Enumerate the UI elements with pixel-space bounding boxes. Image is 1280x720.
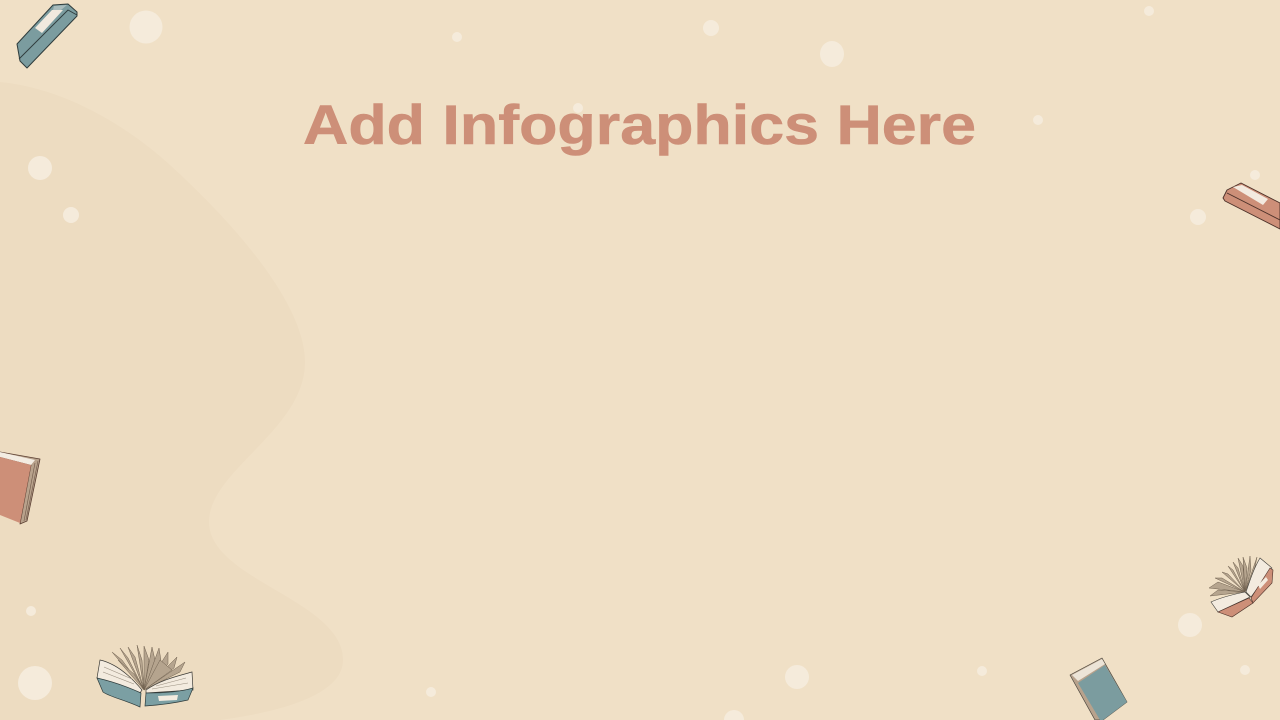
page text lines <box>103 667 188 689</box>
icon: open salmon book right <box>1209 556 1273 617</box>
title: Add Infographics Here <box>303 93 976 156</box>
book pages <box>1211 592 1250 612</box>
salmon cover <box>1218 598 1253 617</box>
fanned pages <box>112 645 185 690</box>
book pages <box>97 660 142 693</box>
cover label <box>158 695 178 701</box>
icon: salmon closed book top right <box>1223 183 1280 229</box>
icon: teal closed book top left <box>17 4 77 68</box>
cover label <box>1258 577 1268 589</box>
background blob <box>0 82 343 720</box>
fanned pages <box>1209 556 1257 596</box>
icon: open teal book bottom left <box>97 645 193 707</box>
icon: salmon closed book left <box>0 452 40 524</box>
icon: teal closed book bottom right <box>1070 658 1127 720</box>
teal cover <box>97 678 141 707</box>
